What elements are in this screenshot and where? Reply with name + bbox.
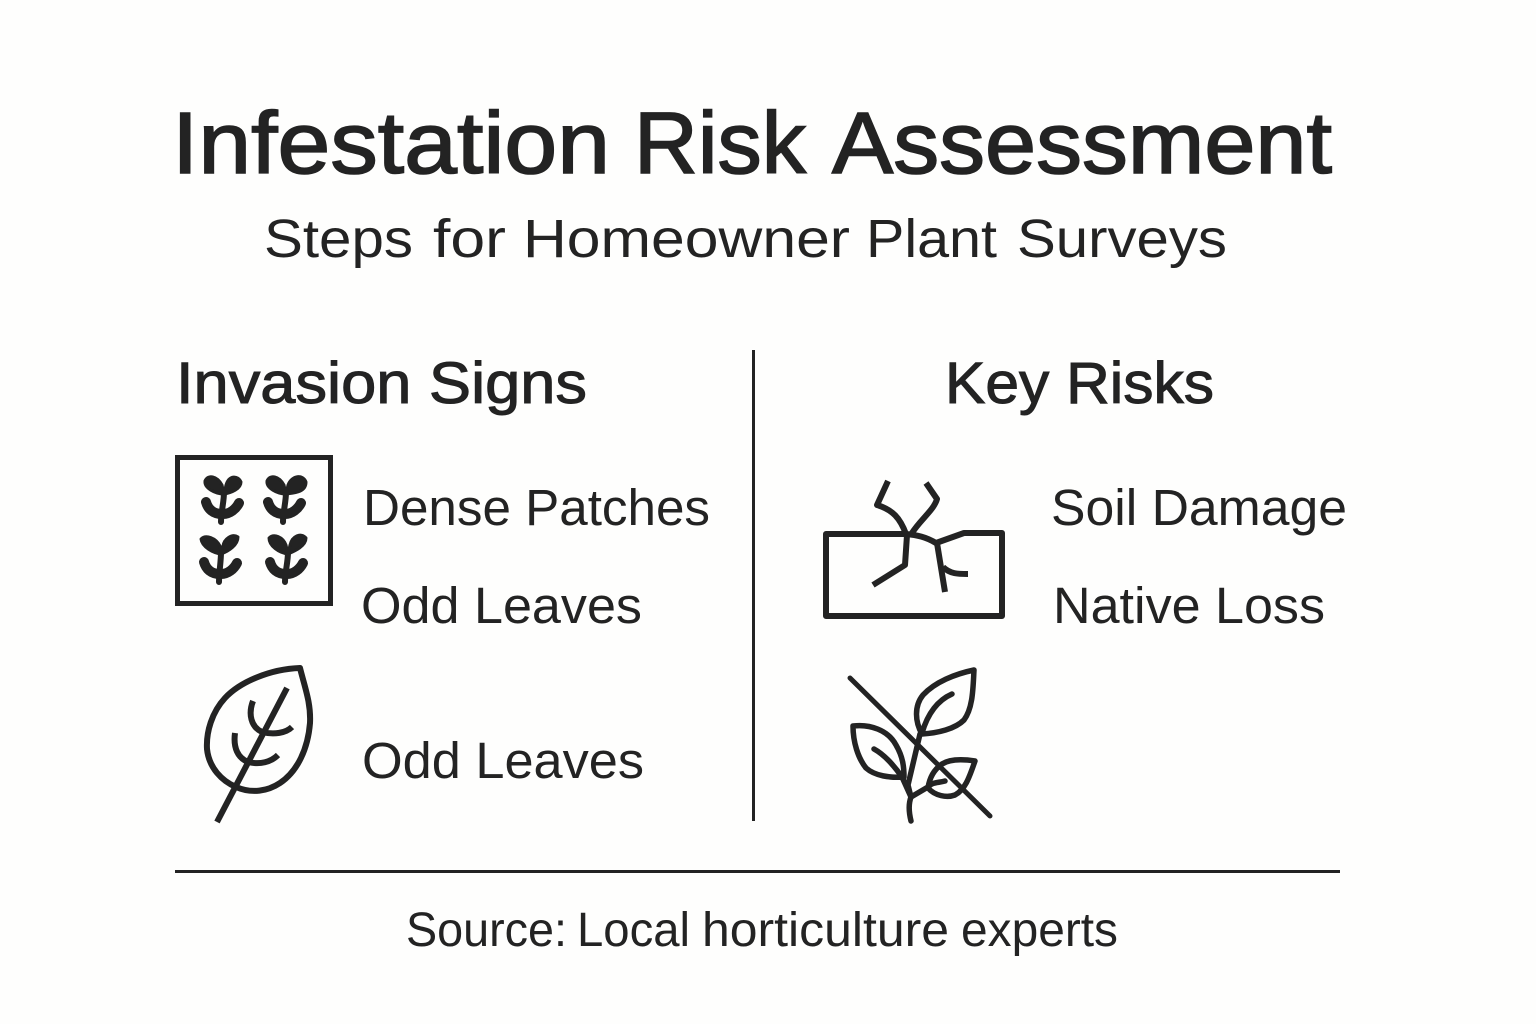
label: odd leaves, lower: Odd Leaves xyxy=(362,732,644,789)
footer rule xyxy=(175,870,1340,873)
source note: horticulture xyxy=(702,904,949,957)
icon: cracked soil xyxy=(826,481,1002,616)
heading: key risks: Key Risks xyxy=(945,351,1214,416)
icon: dense patches grid of sprouts xyxy=(178,458,330,604)
label: dense patches: Dense Patches xyxy=(363,479,710,536)
subtitle: Homeowner xyxy=(523,209,850,269)
panel: invasion signs xyxy=(176,351,710,822)
label: native loss: Native Loss xyxy=(1053,577,1325,634)
source note: Local xyxy=(577,904,690,957)
label: odd leaves, upper: Odd Leaves xyxy=(361,577,642,634)
source note: experts xyxy=(961,904,1118,957)
source note: Source: xyxy=(406,904,567,957)
subtitle xyxy=(264,209,1227,269)
label: soil damage: Soil Damage xyxy=(1051,479,1347,536)
subtitle: Steps xyxy=(264,209,413,269)
title: Infestation xyxy=(172,95,610,192)
title: Assessment xyxy=(832,95,1332,192)
icon: leaf xyxy=(207,668,310,822)
center divider xyxy=(752,350,755,821)
heading: invasion signs: Invasion Signs xyxy=(176,351,587,416)
icon: crossed-out plant xyxy=(850,670,990,821)
panel: key risks xyxy=(826,351,1347,821)
subtitle: Plant xyxy=(866,209,997,269)
subtitle: Surveys xyxy=(1017,209,1227,269)
title: Risk xyxy=(634,95,806,192)
source note xyxy=(406,904,1118,957)
subtitle: for xyxy=(433,209,506,269)
title xyxy=(172,95,1332,192)
